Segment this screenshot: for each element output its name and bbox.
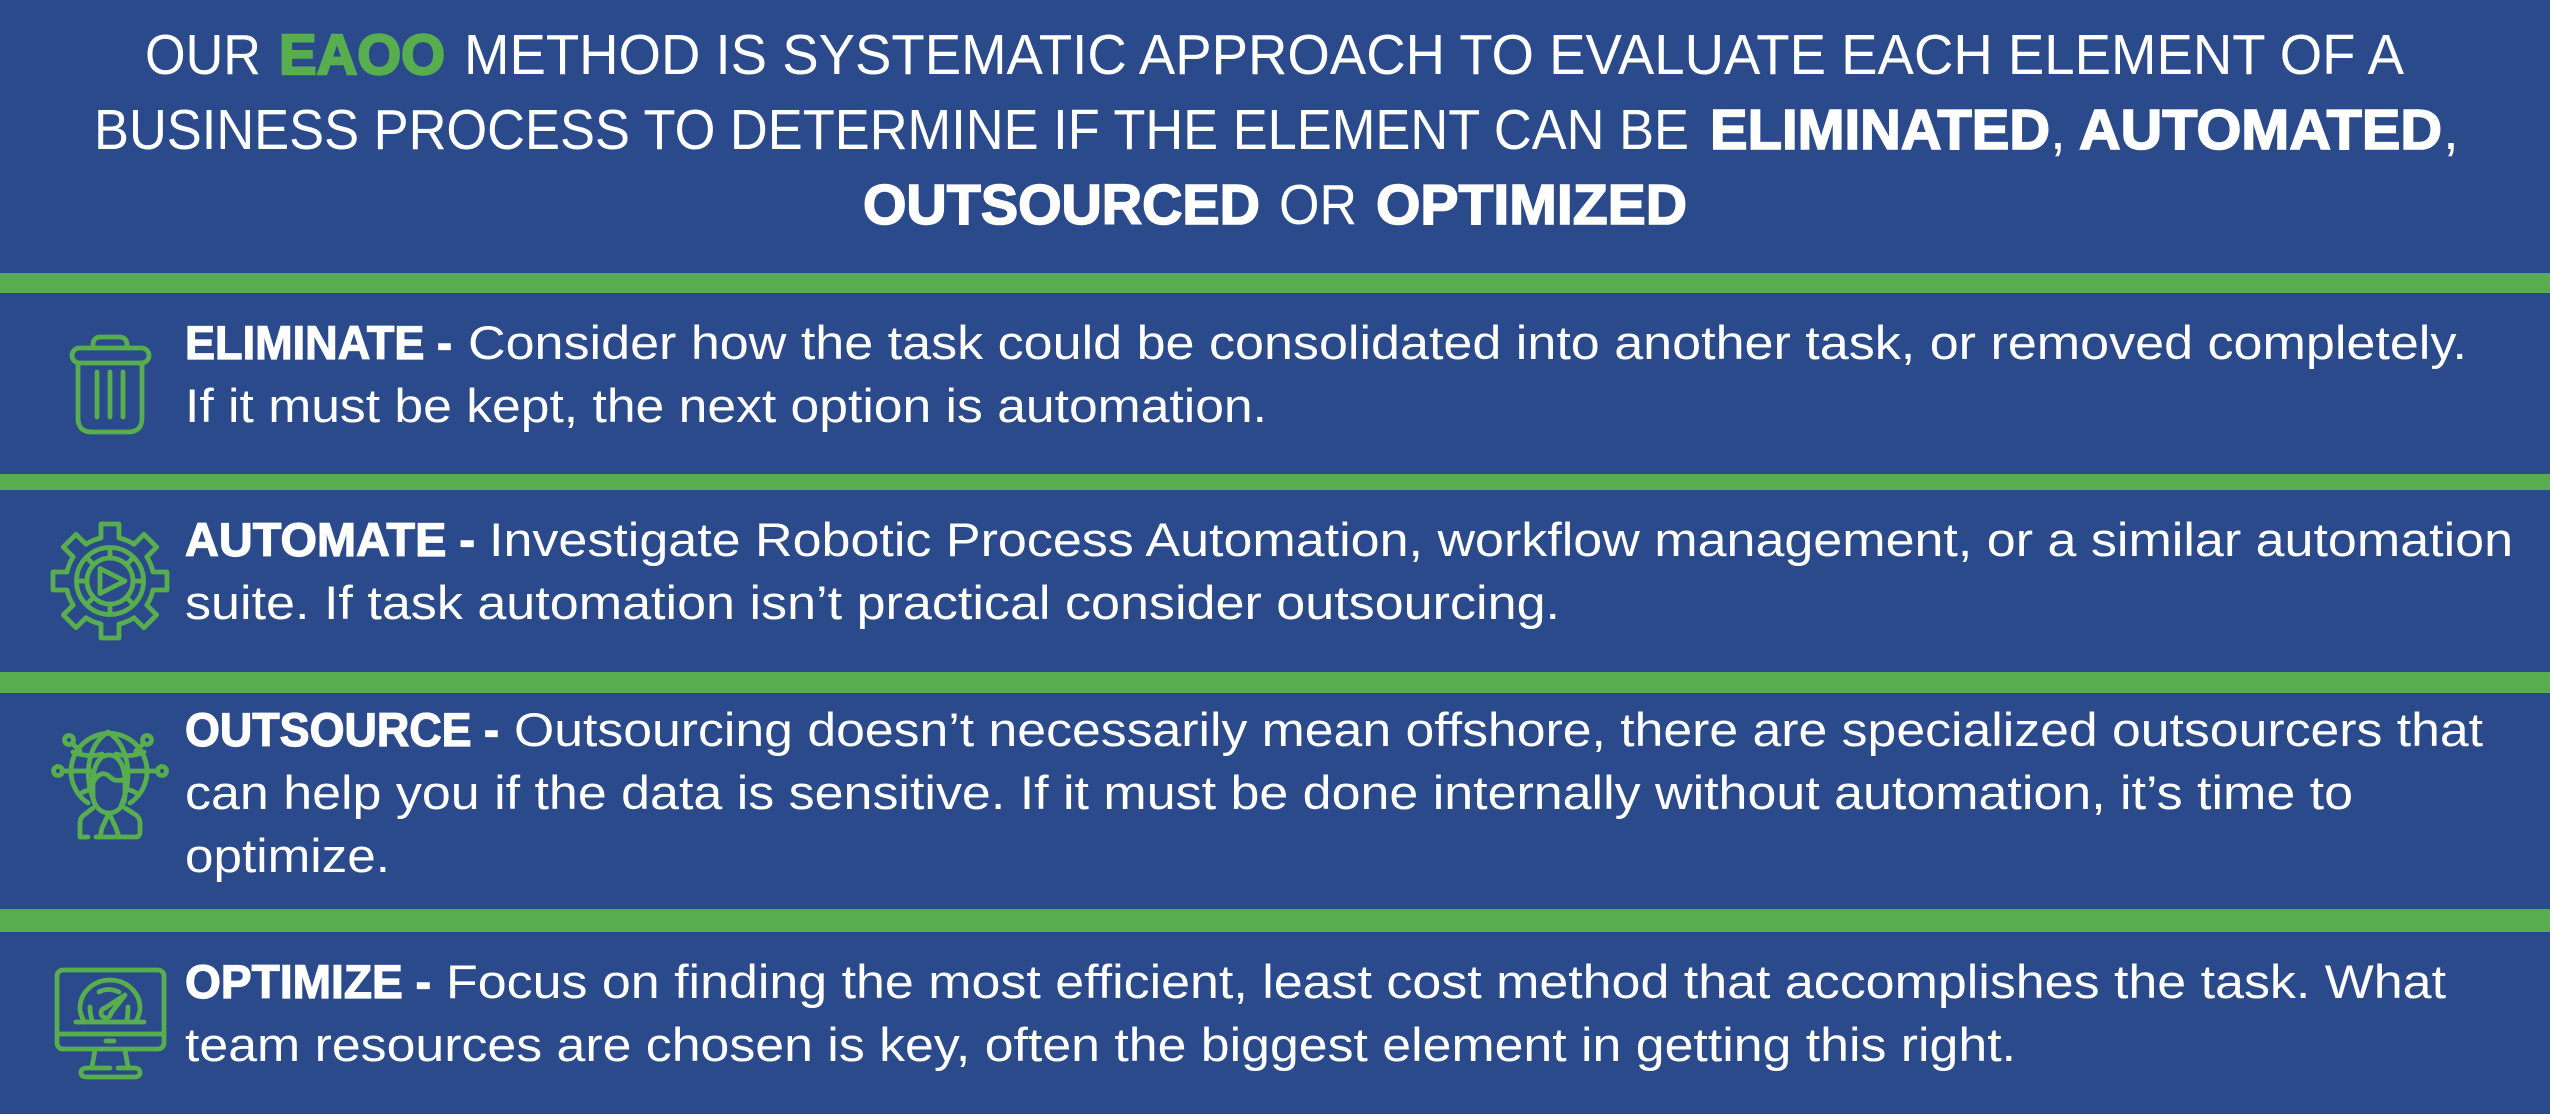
title: EAOO method statement: OUR — [145, 23, 261, 87]
text: eliminate description: If it must be kept, the next option is automation. — [185, 379, 1267, 432]
title: EAOO method statement: OUTSOURCED — [863, 173, 1260, 237]
icon: monitor with gauge — [57, 970, 164, 1077]
title: EAOO method statement: EAOO — [279, 23, 445, 87]
text: optimize description: team resources are chosen is key, often the biggest element in getting this right. — [185, 1018, 2016, 1071]
title: EAOO method statement: METHOD IS SYSTEMATIC APPROACH TO EVALUATE EACH ELEMENT OF A — [464, 23, 2404, 87]
title: EAOO method statement: , — [2050, 98, 2066, 162]
title: EAOO method statement: AUTOMATED — [2079, 98, 2442, 162]
panel: outsource — [54, 703, 2483, 882]
text: optimize description: Focus on finding the most efficient, least cost method that accomplishes the task. What — [446, 955, 2446, 1008]
icon: trash can — [72, 337, 149, 432]
text: eliminate description: Consider how the task could be consolidated into another task, or removed completely. — [468, 316, 2467, 369]
icon: globe with person — [54, 732, 166, 837]
icon: gear with play button — [53, 524, 167, 638]
text: optimize description: OPTIMIZE - — [185, 955, 431, 1008]
text: outsource description: can help you if the data is sensitive. If it must be done internally without automation, it’s time to — [185, 766, 2353, 819]
text: eliminate description — [185, 316, 2467, 432]
title: EAOO method statement: , — [2443, 98, 2459, 162]
text: outsource description: OUTSOURCE - — [185, 703, 499, 756]
text: outsource description: optimize. — [185, 829, 390, 882]
title: EAOO method statement: OPTIMIZED — [1376, 173, 1687, 237]
text: automate description: suite. If task automation isn’t practical consider outsourcing. — [185, 576, 1560, 629]
panel: eliminate — [72, 316, 2467, 432]
text: automate description: AUTOMATE - — [185, 513, 475, 566]
panel: optimize — [57, 955, 2446, 1077]
text: outsource description: Outsourcing doesn’t necessarily mean offshore, there are specialized outsourcers that — [514, 703, 2483, 756]
text: outsource description — [185, 703, 2483, 882]
text: optimize description — [185, 955, 2446, 1071]
panel: automate — [53, 513, 2513, 638]
title: EAOO method statement — [94, 23, 2459, 237]
text: automate description: Investigate Robotic Process Automation, workflow management, or a similar automation — [489, 513, 2513, 566]
title: EAOO method statement: ELIMINATED — [1710, 98, 2050, 162]
title: EAOO method statement: OR — [1279, 173, 1357, 237]
text: automate description — [185, 513, 2513, 629]
text: eliminate description: ELIMINATE - — [185, 316, 452, 369]
title: EAOO method statement: BUSINESS PROCESS TO DETERMINE IF THE ELEMENT CAN BE — [94, 98, 1689, 162]
